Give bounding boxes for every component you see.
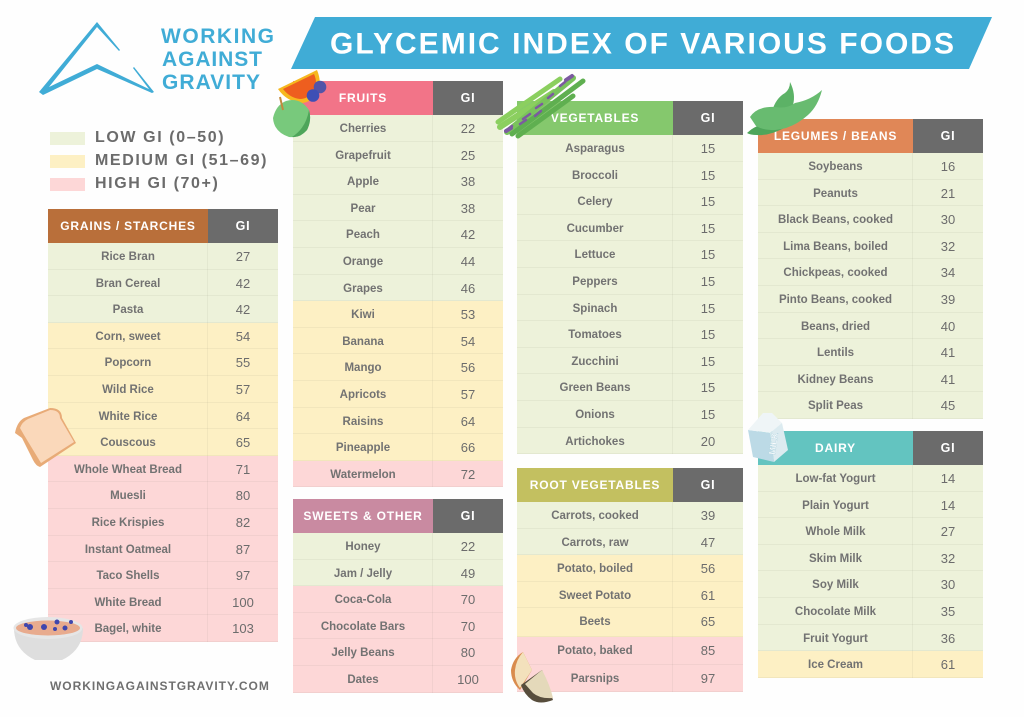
rows: vegetables: 15 <box>701 380 715 395</box>
rows: dairy: Fruit Yogurt <box>803 633 868 645</box>
rows: fruits: 64 <box>461 414 475 429</box>
rows: grains: 71 <box>236 462 250 477</box>
rows: legumes: Kidney Beans <box>797 374 874 386</box>
rows: dairy: 27 <box>941 524 955 539</box>
rows: grains: 82 <box>236 515 250 530</box>
rows: sweets: 49 <box>461 566 475 581</box>
rows: fruits: Apple <box>347 176 379 188</box>
table: grains / starches <box>48 209 278 642</box>
icon: milk carton: MILK <box>767 432 780 455</box>
rows: fruits: Grapes <box>343 283 383 295</box>
rows: legumes: Lentils <box>817 347 854 359</box>
rows: fruits: 42 <box>461 227 475 242</box>
table: vegetables <box>517 101 743 454</box>
rows: root vegetables <box>517 502 743 692</box>
rows: grains: Bagel, white <box>94 623 162 635</box>
rows: vegetables: Celery <box>577 196 613 208</box>
rows: grains: Bran Cereal <box>96 278 160 290</box>
logo wordmark: WORKING <box>161 25 274 48</box>
rows: root vegetables: 85 <box>701 643 715 658</box>
header: dairy: GI <box>941 441 955 455</box>
rows: grains: 27 <box>236 249 250 264</box>
rows: vegetables <box>517 135 743 454</box>
rows: grains: Rice Krispies <box>92 517 164 529</box>
legend: HIGH GI (70+) <box>95 175 219 192</box>
rows: legumes: 30 <box>941 212 955 227</box>
rows: grains: 42 <box>236 302 250 317</box>
background graphics: logo and title <box>39 17 992 95</box>
rows: legumes: Lima Beans, boiled <box>783 241 888 253</box>
header: vegetables: VEGETABLES <box>551 111 639 125</box>
rows: legumes: Peanuts <box>813 188 858 200</box>
rows: vegetables: Artichokes <box>565 436 625 448</box>
rows: sweets: 70 <box>461 592 475 607</box>
rows: vegetables: 15 <box>701 301 715 316</box>
rows: fruits: Orange <box>343 256 383 268</box>
rows: fruits: 38 <box>461 174 475 189</box>
rows: root vegetables: Parsnips <box>571 673 619 685</box>
icon: green soybeans <box>747 82 822 135</box>
rows: grains: 100 <box>232 595 254 610</box>
rows: root vegetables: 65 <box>701 614 715 629</box>
rows: root vegetables: Carrots, cooked <box>551 510 639 522</box>
rows: dairy: 30 <box>941 577 955 592</box>
rows: dairy: 14 <box>941 471 955 486</box>
rows: grains: Rice Bran <box>101 251 155 263</box>
header: sweets: SWEETS & OTHER <box>303 509 423 523</box>
rows: vegetables: 20 <box>701 434 715 449</box>
rows: fruits: 25 <box>461 148 475 163</box>
logo wordmark <box>161 25 274 94</box>
table: legumes / beans <box>758 119 983 419</box>
rows: sweets: Coca-Cola <box>335 594 391 606</box>
header: root vegetables: GI <box>701 478 715 492</box>
rows: legumes: Chickpeas, cooked <box>783 267 888 279</box>
rows: fruits: 38 <box>461 201 475 216</box>
rows: root vegetables: 56 <box>701 561 715 576</box>
rows: fruits: Banana <box>342 336 384 348</box>
header: root vegetables <box>517 468 743 502</box>
rows: grains: Muesli <box>110 490 146 502</box>
rows: dairy: Ice Cream <box>808 659 863 671</box>
icon: sliced potato <box>511 652 553 702</box>
rows: fruits: Pear <box>351 203 375 215</box>
rows: legumes: Split Peas <box>808 400 863 412</box>
rows: legumes: 40 <box>941 319 955 334</box>
rows: legumes: Beans, dried <box>801 321 870 333</box>
rows: grains: Instant Oatmeal <box>85 544 171 556</box>
rows: root vegetables: Potato, boiled <box>557 563 633 575</box>
table: fruits <box>293 81 503 487</box>
rows: vegetables: 15 <box>701 221 715 236</box>
rows: vegetables: Spinach <box>573 303 617 315</box>
icon: asparagus <box>498 76 583 136</box>
rows: sweets: Chocolate Bars <box>321 621 405 633</box>
rows: fruits: Cherries <box>340 123 386 135</box>
rows: fruits: Apricots <box>340 389 386 401</box>
rows: fruits: Pineapple <box>336 442 390 454</box>
header: fruits <box>293 81 503 115</box>
rows: vegetables: Cucumber <box>567 223 623 235</box>
rows: legumes: Soybeans <box>808 161 863 173</box>
header: fruits: FRUITS <box>339 91 387 105</box>
rows: legumes: 45 <box>941 398 955 413</box>
rows: dairy: 32 <box>941 551 955 566</box>
icon: orange slice and blueberries <box>278 70 326 103</box>
rows: vegetables: 15 <box>701 194 715 209</box>
rows: root vegetables: 61 <box>701 588 715 603</box>
rows: vegetables: 15 <box>701 247 715 262</box>
rows: fruits: Kiwi <box>351 309 375 321</box>
rows: fruits: 66 <box>461 440 475 455</box>
table: sweets & other <box>293 499 503 693</box>
rows: sweets: Honey <box>345 541 381 553</box>
header: grains: GI <box>236 219 250 233</box>
rows: root vegetables: Beets <box>579 616 611 628</box>
rows: sweets: 22 <box>461 539 475 554</box>
rows: root vegetables: Carrots, raw <box>561 537 629 549</box>
icon: cereal bowl <box>14 617 83 660</box>
icon: milk carton <box>748 413 788 462</box>
rows: legumes: 39 <box>941 292 955 307</box>
legend: MEDIUM GI (51–69) <box>95 152 268 169</box>
rows: vegetables: 15 <box>701 407 715 422</box>
rows: grains: Corn, sweet <box>95 331 161 343</box>
rows: legumes: 41 <box>941 372 955 387</box>
rows: grains: 65 <box>236 435 250 450</box>
legend: LOW GI (0–50) <box>95 129 225 146</box>
rows: sweets: 80 <box>461 645 475 660</box>
rows: vegetables: Zucchini <box>571 356 619 368</box>
header: legumes <box>758 119 983 153</box>
rows: legumes: 16 <box>941 159 955 174</box>
rows: vegetables: Peppers <box>572 276 618 288</box>
header: fruits: GI <box>461 91 475 105</box>
website footer: WORKINGAGAINSTGRAVITY.COM <box>50 679 270 693</box>
rows: legumes: 41 <box>941 345 955 360</box>
rows: grains: White Bread <box>94 597 162 609</box>
rows: dairy: Plain Yogurt <box>802 500 869 512</box>
rows: root vegetables: Potato, baked <box>557 645 633 657</box>
rows: vegetables: 15 <box>701 168 715 183</box>
rows: sweets: 70 <box>461 619 475 634</box>
rows: root vegetables: 47 <box>701 535 715 550</box>
header: dairy: DAIRY <box>815 441 856 455</box>
rows: root vegetables: Sweet Potato <box>559 590 631 602</box>
rows: vegetables: 15 <box>701 141 715 156</box>
rows: vegetables: Asparagus <box>565 143 625 155</box>
rows: fruits: 54 <box>461 334 475 349</box>
rows: vegetables: Broccoli <box>572 170 618 182</box>
rows: sweets: Jam / Jelly <box>334 568 392 580</box>
rows: legumes: 21 <box>941 186 955 201</box>
header: legumes: GI <box>941 129 955 143</box>
rows: dairy <box>758 465 983 678</box>
rows: dairy: Chocolate Milk <box>795 606 876 618</box>
rows: fruits: Grapefruit <box>335 150 391 162</box>
rows: grains: 103 <box>232 621 254 636</box>
rows: fruits: 56 <box>461 360 475 375</box>
rows: vegetables: 15 <box>701 354 715 369</box>
rows: dairy: 14 <box>941 498 955 513</box>
rows: fruits: Mango <box>344 362 382 374</box>
rows: legumes <box>758 153 983 419</box>
rows: legumes: 34 <box>941 265 955 280</box>
rows: sweets: Jelly Beans <box>331 647 395 659</box>
rows: grains: 57 <box>236 382 250 397</box>
rows: dairy: Soy Milk <box>812 579 859 591</box>
rows: fruits: 57 <box>461 387 475 402</box>
header: vegetables <box>517 101 743 135</box>
rows: dairy: Low-fat Yogurt <box>795 473 876 485</box>
rows: grains: Whole Wheat Bread <box>74 464 182 476</box>
rows: grains: 97 <box>236 568 250 583</box>
rows: grains: Couscous <box>100 437 156 449</box>
rows: vegetables: 15 <box>701 327 715 342</box>
rows: legumes: Black Beans, cooked <box>778 214 893 226</box>
rows: vegetables: 15 <box>701 274 715 289</box>
rows: dairy: 36 <box>941 631 955 646</box>
header: root vegetables: ROOT VEGETABLES <box>530 478 660 492</box>
rows: sweets <box>293 533 503 693</box>
header: grains <box>48 209 278 243</box>
rows: grains: Pasta <box>113 304 143 316</box>
icon: green apple <box>273 97 310 137</box>
rows: legumes: 32 <box>941 239 955 254</box>
rows: fruits: 22 <box>461 121 475 136</box>
rows: fruits: 46 <box>461 281 475 296</box>
rows: grains: Wild Rice <box>102 384 154 396</box>
header: grains: GRAINS / STARCHES <box>60 219 196 233</box>
rows: fruits: 44 <box>461 254 475 269</box>
rows: grains: Taco Shells <box>96 570 160 582</box>
rows: grains: 64 <box>236 409 250 424</box>
header: legumes: LEGUMES / BEANS <box>774 129 897 143</box>
rows: dairy: Whole Milk <box>805 526 866 538</box>
header: dairy <box>758 431 983 465</box>
header: sweets <box>293 499 503 533</box>
rows: grains: White Rice <box>99 411 157 423</box>
rows: fruits: Raisins <box>343 416 383 428</box>
rows: dairy: Skim Milk <box>809 553 862 565</box>
rows: grains <box>48 243 278 642</box>
rows: grains: 54 <box>236 329 250 344</box>
rows: sweets: Dates <box>347 674 379 686</box>
title banner: GLYCEMIC INDEX OF VARIOUS FOODS <box>330 28 954 60</box>
rows: fruits <box>293 115 503 487</box>
rows: legumes: Pinto Beans, cooked <box>779 294 892 306</box>
rows: grains: 87 <box>236 542 250 557</box>
rows: root vegetables: 39 <box>701 508 715 523</box>
title banner <box>291 17 992 69</box>
table: dairy <box>758 431 983 678</box>
rows: dairy: 61 <box>941 657 955 672</box>
rows: fruits: 53 <box>461 307 475 322</box>
rows: fruits: 72 <box>461 467 475 482</box>
rows: grains: Popcorn <box>105 357 151 369</box>
table: root vegetables <box>517 468 743 692</box>
rows: sweets: 100 <box>457 672 479 687</box>
header: sweets: GI <box>461 509 475 523</box>
header: vegetables: GI <box>701 111 715 125</box>
logo wordmark: GRAVITY <box>162 71 260 94</box>
rows: dairy: 35 <box>941 604 955 619</box>
rows: fruits: Watermelon <box>330 469 396 481</box>
rows: grains: 55 <box>236 355 250 370</box>
rows: vegetables: Lettuce <box>575 249 615 261</box>
rows: vegetables: Tomatoes <box>568 329 622 341</box>
rows: vegetables: Green Beans <box>560 382 630 394</box>
rows: grains: 42 <box>236 276 250 291</box>
logo mountain <box>39 22 154 95</box>
icon: bread slice <box>15 408 76 467</box>
rows: vegetables: Onions <box>575 409 615 421</box>
rows: root vegetables: 97 <box>701 671 715 686</box>
rows: grains: 80 <box>236 488 250 503</box>
logo wordmark: AGAINST <box>162 48 262 71</box>
legend <box>50 129 268 192</box>
rows: fruits: Peach <box>346 229 380 241</box>
